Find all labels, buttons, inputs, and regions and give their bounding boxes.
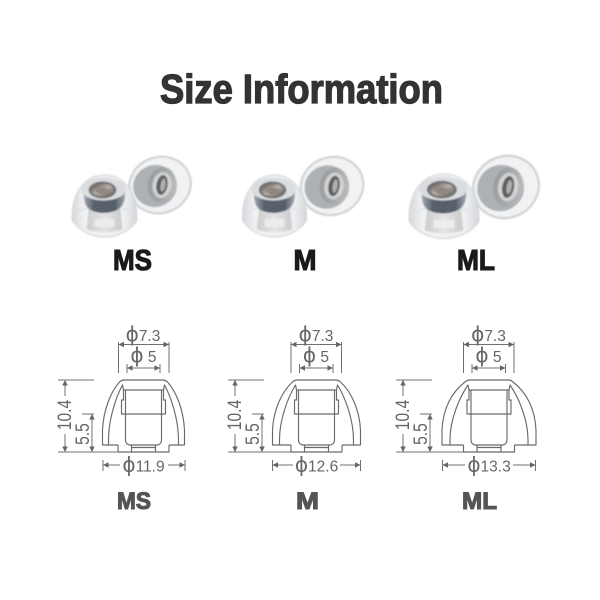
dimension: base diameter 13.3: ϕ13.3 xyxy=(467,452,511,476)
dimension: inner diameter 5 xyxy=(127,343,160,373)
label: ML drawing: ML xyxy=(462,488,497,515)
dimension: top diameter 7.3 xyxy=(291,322,342,373)
dimension: top diameter 7.3: ϕ7.3 xyxy=(126,322,160,346)
label: MS: MS xyxy=(113,245,152,277)
label: M drawing: M xyxy=(296,488,319,515)
ear tip section outline MS xyxy=(102,380,184,452)
dimension: inner diameter 5: ϕ 5 xyxy=(475,343,502,367)
dimension: top diameter 7.3 xyxy=(464,322,514,373)
photo: ML ear tips xyxy=(409,147,547,238)
dimension: height 10.4 xyxy=(392,380,463,452)
dimension: base diameter 13.3 xyxy=(442,452,536,476)
photo: M ear tips xyxy=(243,149,371,237)
dimension: inner diameter 5: ϕ 5 xyxy=(303,343,329,367)
dimension: height 10.4 xyxy=(54,380,118,452)
dimension drawing: M xyxy=(224,322,360,476)
ear tip section outline ML xyxy=(442,380,536,452)
dimension: height 10.4 xyxy=(224,380,291,452)
ear tip section outline M xyxy=(272,380,360,452)
label: ML: ML xyxy=(457,245,495,277)
dimension: height 10.4: 10.4 xyxy=(392,400,413,430)
label: MS drawing: MS xyxy=(117,488,151,515)
dimension: height 5.5 xyxy=(72,414,94,452)
dimension: height 10.4: 10.4 xyxy=(54,400,75,430)
dimension: height 5.5 xyxy=(410,414,432,452)
label: M: M xyxy=(294,245,316,277)
dimension: top diameter 7.3: ϕ7.3 xyxy=(299,322,333,346)
dimension: base diameter 11.9: ϕ11.9 xyxy=(122,452,165,476)
dimension: top diameter 7.3 xyxy=(118,322,169,373)
dimension: base diameter 12.6 xyxy=(272,452,360,476)
title: Size Information xyxy=(160,66,443,112)
dimension: inner diameter 5: ϕ 5 xyxy=(130,343,157,367)
dimension: base diameter 12.6: ϕ12.6 xyxy=(295,452,338,476)
dimension: top diameter 7.3: ϕ7.3 xyxy=(471,322,506,346)
dimension: height 5.5: 5.5 xyxy=(242,423,263,445)
dimension drawing: ML xyxy=(392,322,536,476)
dimension: inner diameter 5 xyxy=(472,343,506,373)
dimension: height 5.5: 5.5 xyxy=(410,423,431,445)
dimension: height 5.5 xyxy=(242,414,264,452)
dimension: height 10.4: 10.4 xyxy=(224,400,245,430)
dimension: height 5.5: 5.5 xyxy=(72,423,93,445)
dimension drawing: MS xyxy=(54,322,185,476)
dimension: base diameter 11.9 xyxy=(103,452,185,476)
dimension: inner diameter 5 xyxy=(300,343,333,373)
photo: MS ear tips xyxy=(72,149,198,237)
